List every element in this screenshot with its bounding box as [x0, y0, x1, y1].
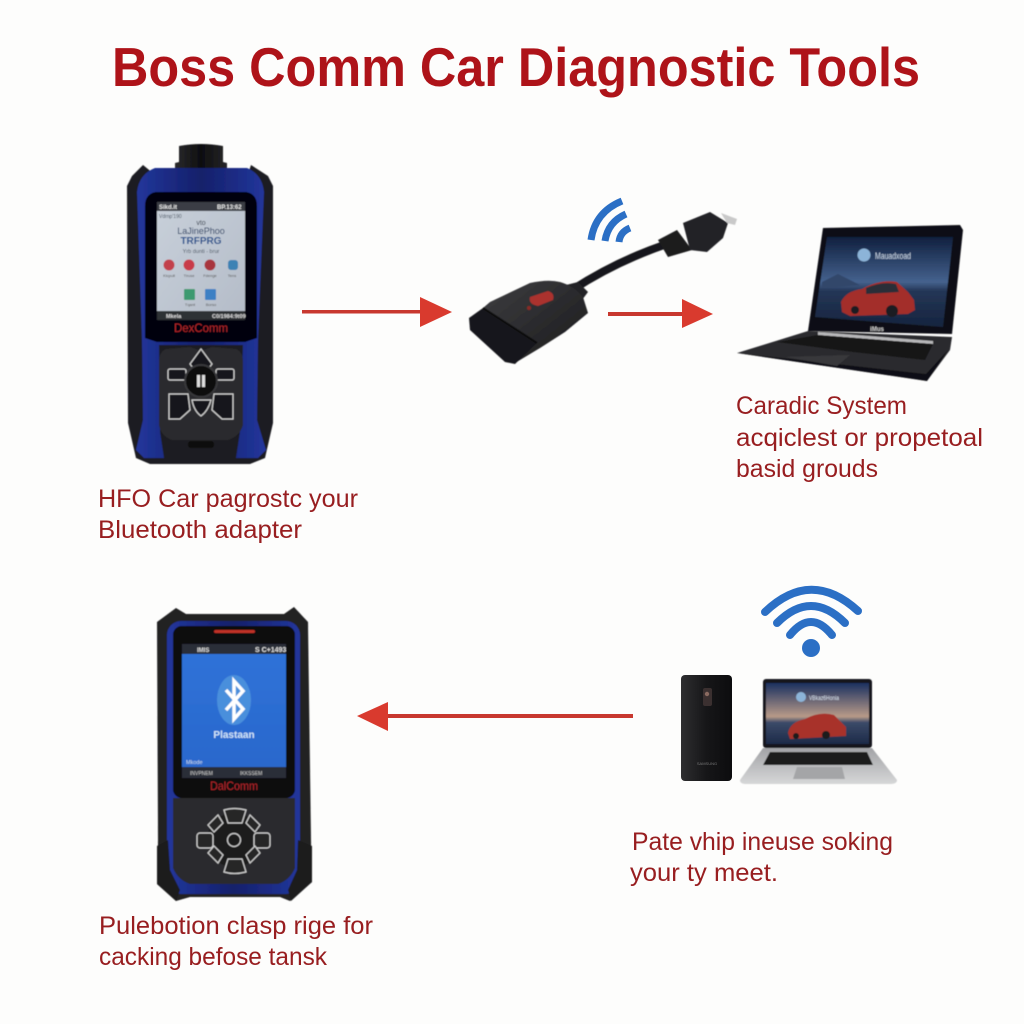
LCD screen: IKKSSEM — [240, 771, 262, 777]
arrow: adapter to laptop — [608, 299, 713, 328]
LCD screen: Fdenge — [203, 273, 218, 278]
LCD screen — [157, 202, 246, 320]
text block: top left description: HFO Car pagrostc your — [98, 485, 358, 513]
rugged black body — [127, 165, 273, 464]
trackpad — [785, 355, 850, 366]
brand label: DalComm — [210, 779, 258, 793]
text block: top left description: Bluetooth adapter — [98, 516, 302, 544]
device: smartphone: SAMSUNG — [697, 761, 717, 766]
LCD screen: TRFPRG — [180, 236, 222, 247]
device: laptop top right — [737, 225, 963, 381]
hinge strip — [818, 332, 933, 344]
red indicator — [214, 630, 255, 633]
icon: wifi signal near adapter — [591, 201, 630, 242]
LCD screen: Sikd.it — [159, 205, 177, 211]
blue frame — [136, 168, 266, 458]
display logo — [858, 248, 870, 262]
laptop brand: iMus — [870, 327, 884, 333]
keyboard — [777, 335, 933, 360]
LCD screen: Vdrnp'190 — [159, 214, 182, 220]
keypad buttons — [168, 349, 234, 419]
text block: bottom right description: Pate vhip ineuse soking — [632, 828, 893, 856]
LCD screen — [182, 644, 286, 778]
device: OBD adapter with cable — [469, 212, 737, 364]
device: smartphone — [681, 675, 732, 781]
LCD screen: Tqant — [185, 302, 196, 307]
band on adapter — [483, 308, 537, 343]
top connector — [175, 144, 227, 168]
text block: bottom left description — [99, 912, 373, 971]
display logo — [796, 692, 806, 702]
rugged black body — [157, 607, 312, 901]
LCD screen: Tiruse — [184, 273, 195, 278]
keypad panel — [173, 798, 295, 884]
cable — [572, 245, 664, 290]
car on display — [841, 281, 915, 316]
keyboard — [763, 752, 873, 765]
LCD screen: INVPNEM — [190, 771, 213, 777]
text block: top right description: basid grouds — [736, 455, 878, 483]
screen lid — [763, 679, 872, 748]
silver base — [740, 748, 897, 784]
device: laptop bottom right: VBkaz6Honia — [809, 695, 839, 702]
text block: bottom right description — [630, 828, 893, 887]
keypad buttons — [197, 808, 270, 874]
arrow: devices to bluetooth scanner — [357, 702, 633, 731]
LCD screen: C0/1984:9t09 — [212, 314, 246, 320]
display — [815, 237, 953, 327]
red badge — [530, 291, 553, 306]
trackpad — [793, 767, 845, 779]
text block: bottom left description: Pulebotion clasp rige for — [99, 912, 373, 940]
display — [766, 683, 869, 744]
LCD screen: Borso — [206, 302, 217, 307]
text block: bottom right description: your ty meet. — [630, 859, 778, 887]
adapter body — [483, 281, 588, 363]
keypad panel — [159, 347, 243, 440]
screen caption: Plastaan — [213, 730, 255, 741]
OBD connector — [469, 308, 537, 364]
LCD screen: Yrb dunti - brur — [183, 249, 220, 255]
laptop base — [737, 331, 952, 381]
centre button — [185, 365, 217, 397]
title: Boss Comm Car Diagnostic Tools — [112, 36, 920, 98]
mountains on display — [822, 274, 860, 288]
device: laptop bottom right — [740, 679, 897, 784]
text block: top right description: Caradic System — [736, 392, 907, 420]
text block: top left description — [98, 485, 358, 544]
text block: top right description: acqiclest or propetoal — [736, 424, 983, 452]
centre button — [228, 834, 240, 846]
device: handheld scanner top left — [127, 144, 273, 464]
LCD screen: IMIS — [197, 648, 209, 654]
device: bluetooth scanner bottom left — [157, 607, 312, 901]
LCD screen: Tens — [228, 273, 236, 278]
icon: wifi signal — [765, 590, 858, 657]
cable collar — [566, 282, 588, 300]
screen bezel — [173, 626, 295, 798]
arrow: scanner to adapter — [302, 297, 452, 327]
LCD screen: LaJinePhoo — [177, 226, 225, 236]
LCD screen: vto — [196, 220, 206, 227]
icon: bluetooth — [217, 675, 251, 725]
LCD screen: Klcpull — [163, 273, 175, 278]
car on display — [788, 714, 846, 739]
USB plug — [683, 212, 728, 252]
screen lid — [808, 225, 963, 334]
text block: bottom left description: cacking befose tansk — [99, 943, 327, 971]
keypad hub — [207, 813, 261, 867]
brand label: DexComm — [174, 321, 228, 335]
device: laptop top right: Mauadxoad — [875, 251, 911, 261]
LCD screen: Mkode — [186, 760, 203, 766]
text block: top right description — [736, 392, 983, 483]
blue frame — [167, 621, 300, 894]
LCD screen: BP.13:62 — [217, 205, 242, 211]
LCD screen: Mkela — [166, 314, 182, 320]
screen bezel — [145, 192, 257, 342]
rubber corner bumpers — [157, 840, 180, 901]
LCD screen: S C+1493 — [255, 647, 286, 654]
USB tip — [721, 213, 737, 225]
strain relief — [658, 230, 692, 257]
